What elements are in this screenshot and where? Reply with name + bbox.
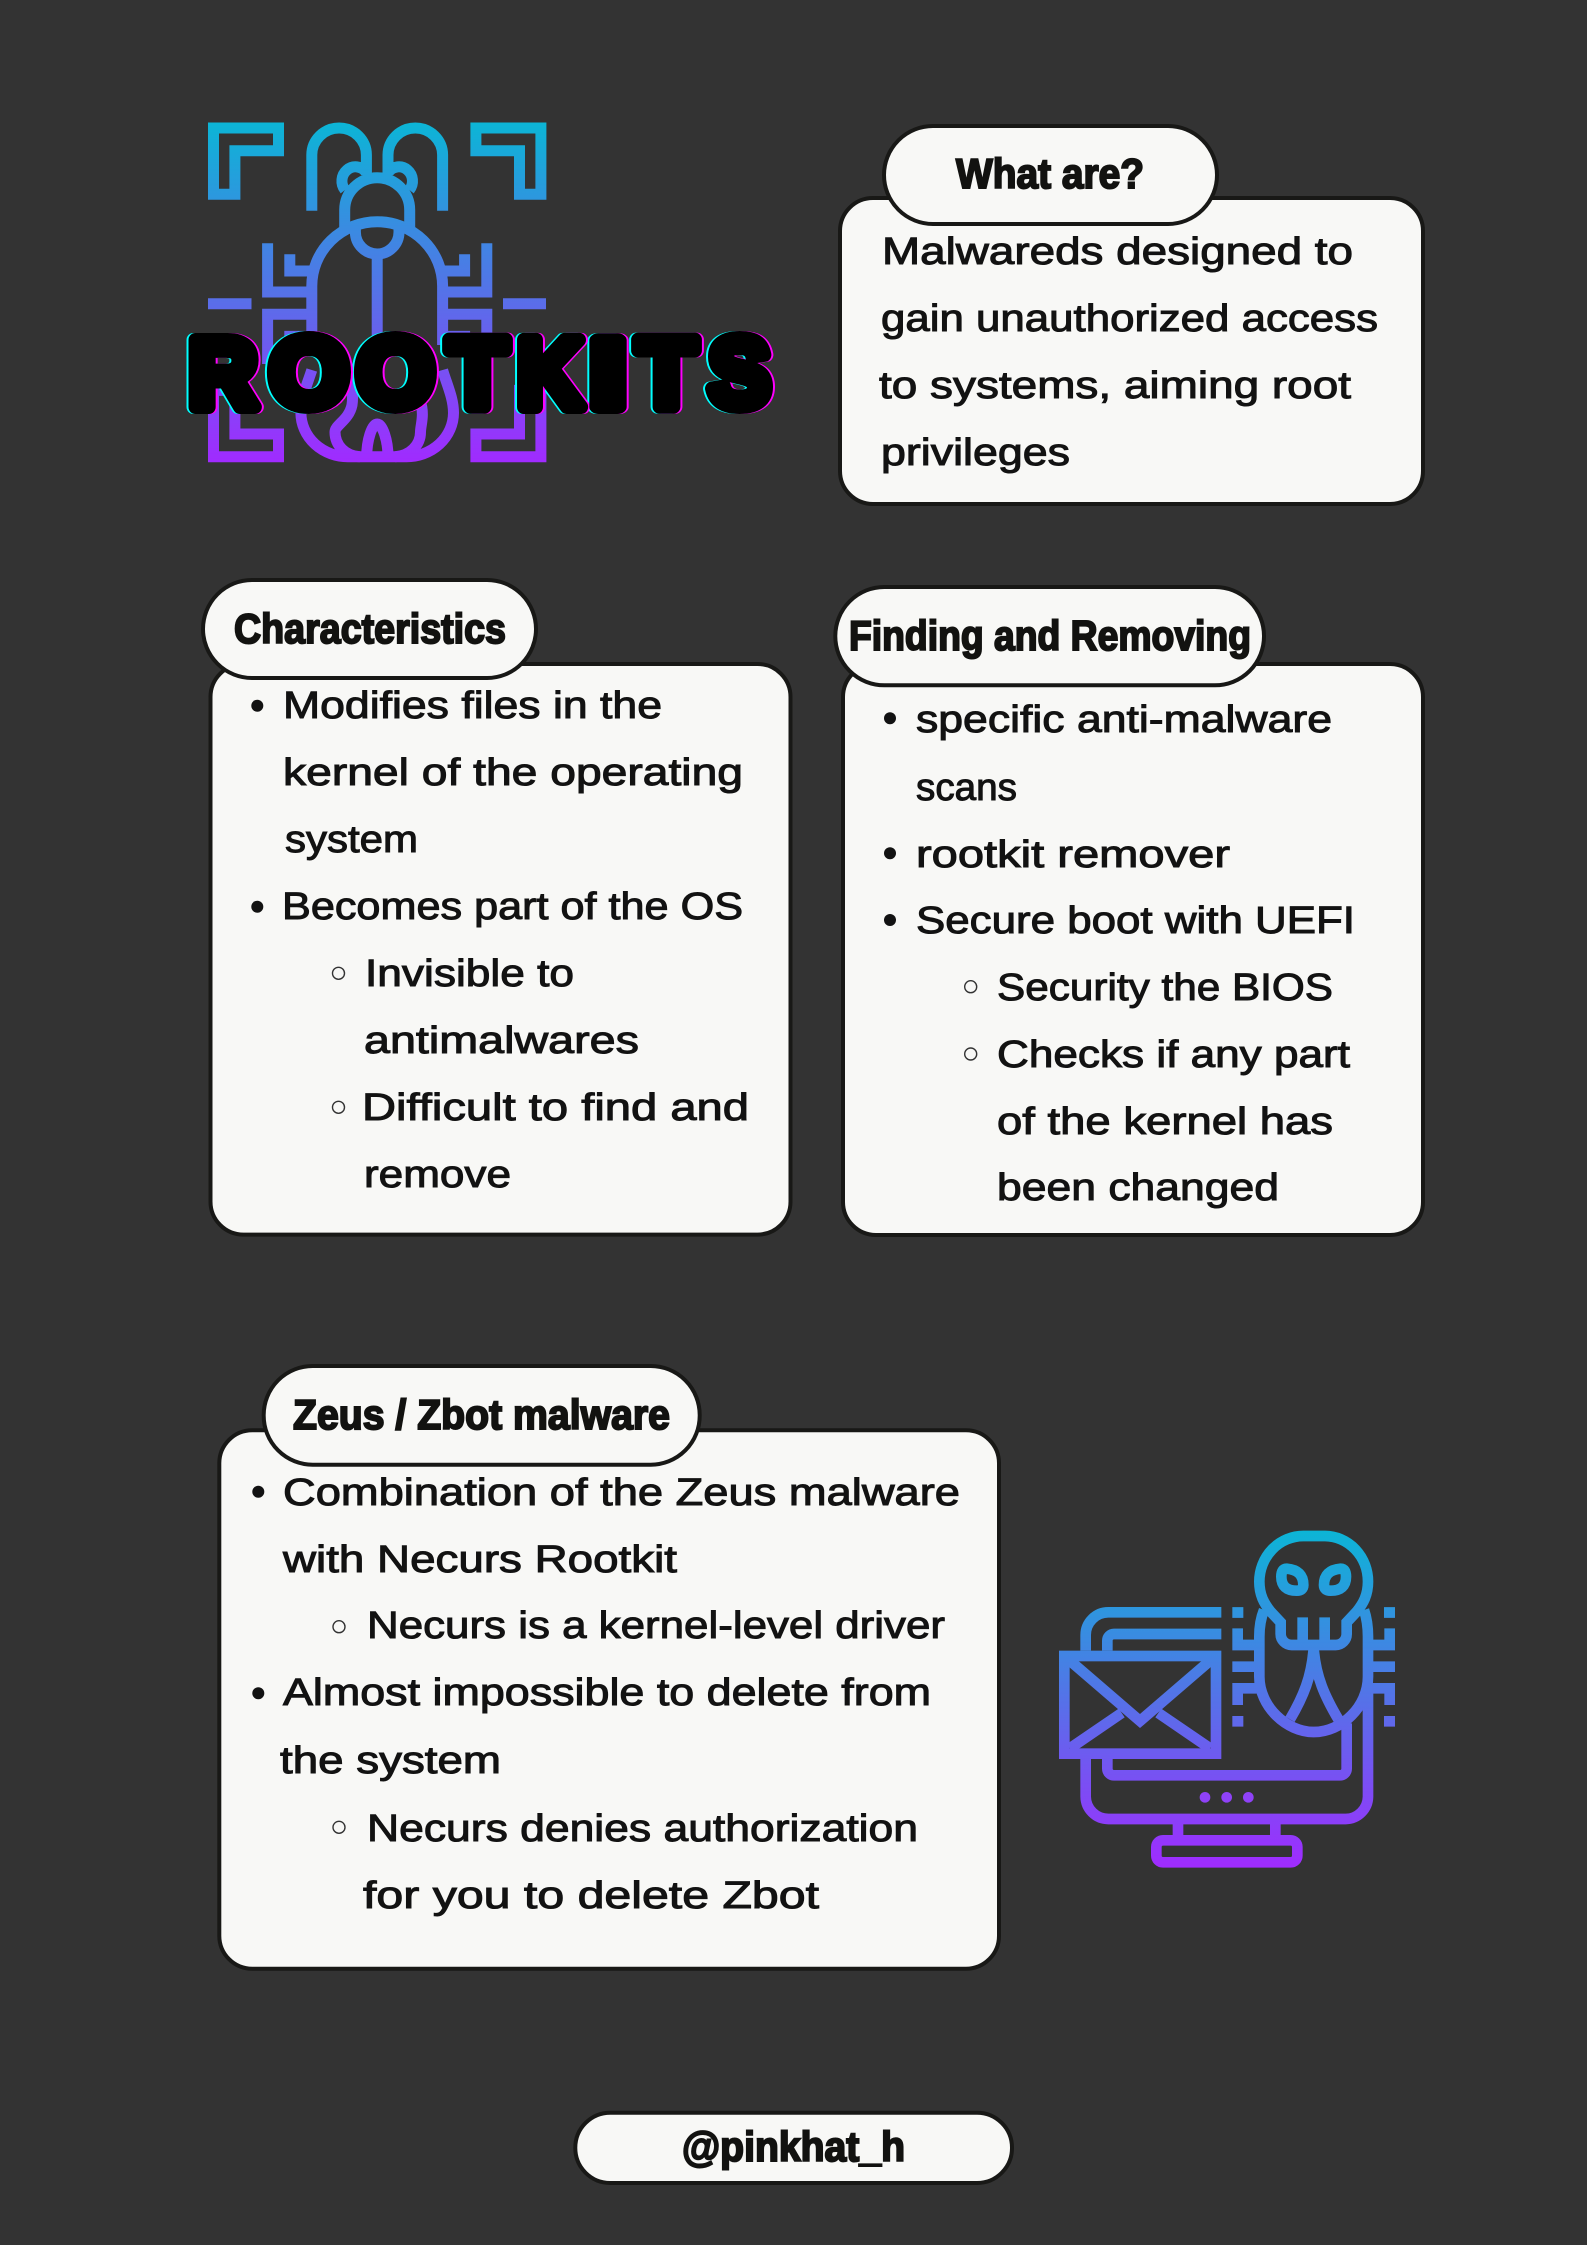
heading pill: [203, 580, 536, 678]
text block: [879, 231, 1378, 474]
list: Becomes part of the OS: [282, 886, 743, 928]
panel: characteristics: [203, 580, 790, 1235]
list: rootkit remover: [916, 834, 1230, 876]
heading: What are?: [956, 150, 1144, 197]
footer handle: [575, 2113, 1012, 2183]
list: [252, 1472, 960, 1917]
list: Combination of the Zeus malware: [283, 1472, 960, 1514]
heading: Zeus / Zbot malware: [293, 1391, 670, 1438]
list: antimalwares: [364, 1020, 639, 1062]
list: Secure boot with UEFI: [916, 900, 1355, 942]
panel box: [840, 198, 1423, 504]
title: S: [709, 318, 770, 427]
list: kernel of the operating: [283, 752, 743, 794]
heading pill: [264, 1366, 700, 1465]
list: Checks if any part: [997, 1034, 1351, 1076]
icon part: monitor: [1086, 1612, 1368, 1862]
text block: privileges: [881, 432, 1070, 474]
list: Almost impossible to delete from: [283, 1672, 931, 1714]
list: specific anti-malware: [916, 699, 1332, 741]
list: Security the BIOS: [997, 967, 1333, 1009]
panel box: [210, 664, 790, 1235]
heading: Finding and Removing: [849, 612, 1251, 659]
icon part: screen dots: [1200, 1792, 1254, 1803]
list: Necurs is a kernel-level driver: [367, 1605, 945, 1647]
text block: Malwareds designed to: [882, 231, 1353, 273]
title: I: [590, 319, 626, 428]
list: [251, 685, 749, 1196]
icon: skull on computer with envelope: [1064, 1536, 1395, 1862]
heading: Characteristics: [234, 605, 506, 652]
list: scans: [916, 767, 1017, 809]
list: for you to delete Zbot: [363, 1875, 820, 1917]
panel: what are: [840, 126, 1423, 504]
title: O: [357, 318, 434, 427]
title: [189, 318, 770, 428]
panel: finding and removing: [835, 587, 1423, 1235]
handle text: @pinkhat_h: [682, 2123, 905, 2170]
list: Modifies files in the: [283, 685, 662, 727]
list: Invisible to: [365, 953, 574, 995]
list: [884, 699, 1355, 1209]
icon part: corner brackets: [214, 128, 541, 457]
title: T: [448, 319, 507, 428]
handle pill: [575, 2113, 1012, 2183]
icon part: head and eyes: [342, 167, 412, 254]
list: remove: [364, 1154, 511, 1196]
list: Necurs denies authorization: [367, 1808, 918, 1850]
icon: rootkit bug: [208, 128, 546, 457]
list: been changed: [997, 1167, 1279, 1209]
text block: gain unauthorized access: [881, 298, 1378, 340]
list: system: [285, 819, 418, 861]
icon part: body: [301, 222, 454, 457]
title: O: [270, 318, 348, 427]
icon part: skull: [1259, 1536, 1368, 1645]
icon part: envelope: [1064, 1656, 1216, 1754]
icon part: legs: [208, 243, 546, 364]
list: Difficult to find and: [362, 1087, 749, 1129]
icon part: legs: [1232, 1612, 1395, 1721]
panel box: [219, 1430, 999, 1969]
title: T: [637, 319, 696, 428]
icon part: antennae: [312, 128, 443, 211]
list: the system: [280, 1740, 501, 1782]
text block: to systems, aiming root: [879, 365, 1352, 407]
list: of the kernel has: [997, 1101, 1333, 1143]
panel box: [843, 664, 1423, 1235]
panel: zeus zbot malware: [219, 1366, 999, 1969]
heading pill: [884, 126, 1217, 224]
icon part: bug body: [1259, 1610, 1368, 1732]
title: R: [189, 319, 257, 428]
title: K: [518, 319, 582, 428]
heading pill: [835, 587, 1264, 685]
list: with Necurs Rootkit: [282, 1539, 678, 1581]
